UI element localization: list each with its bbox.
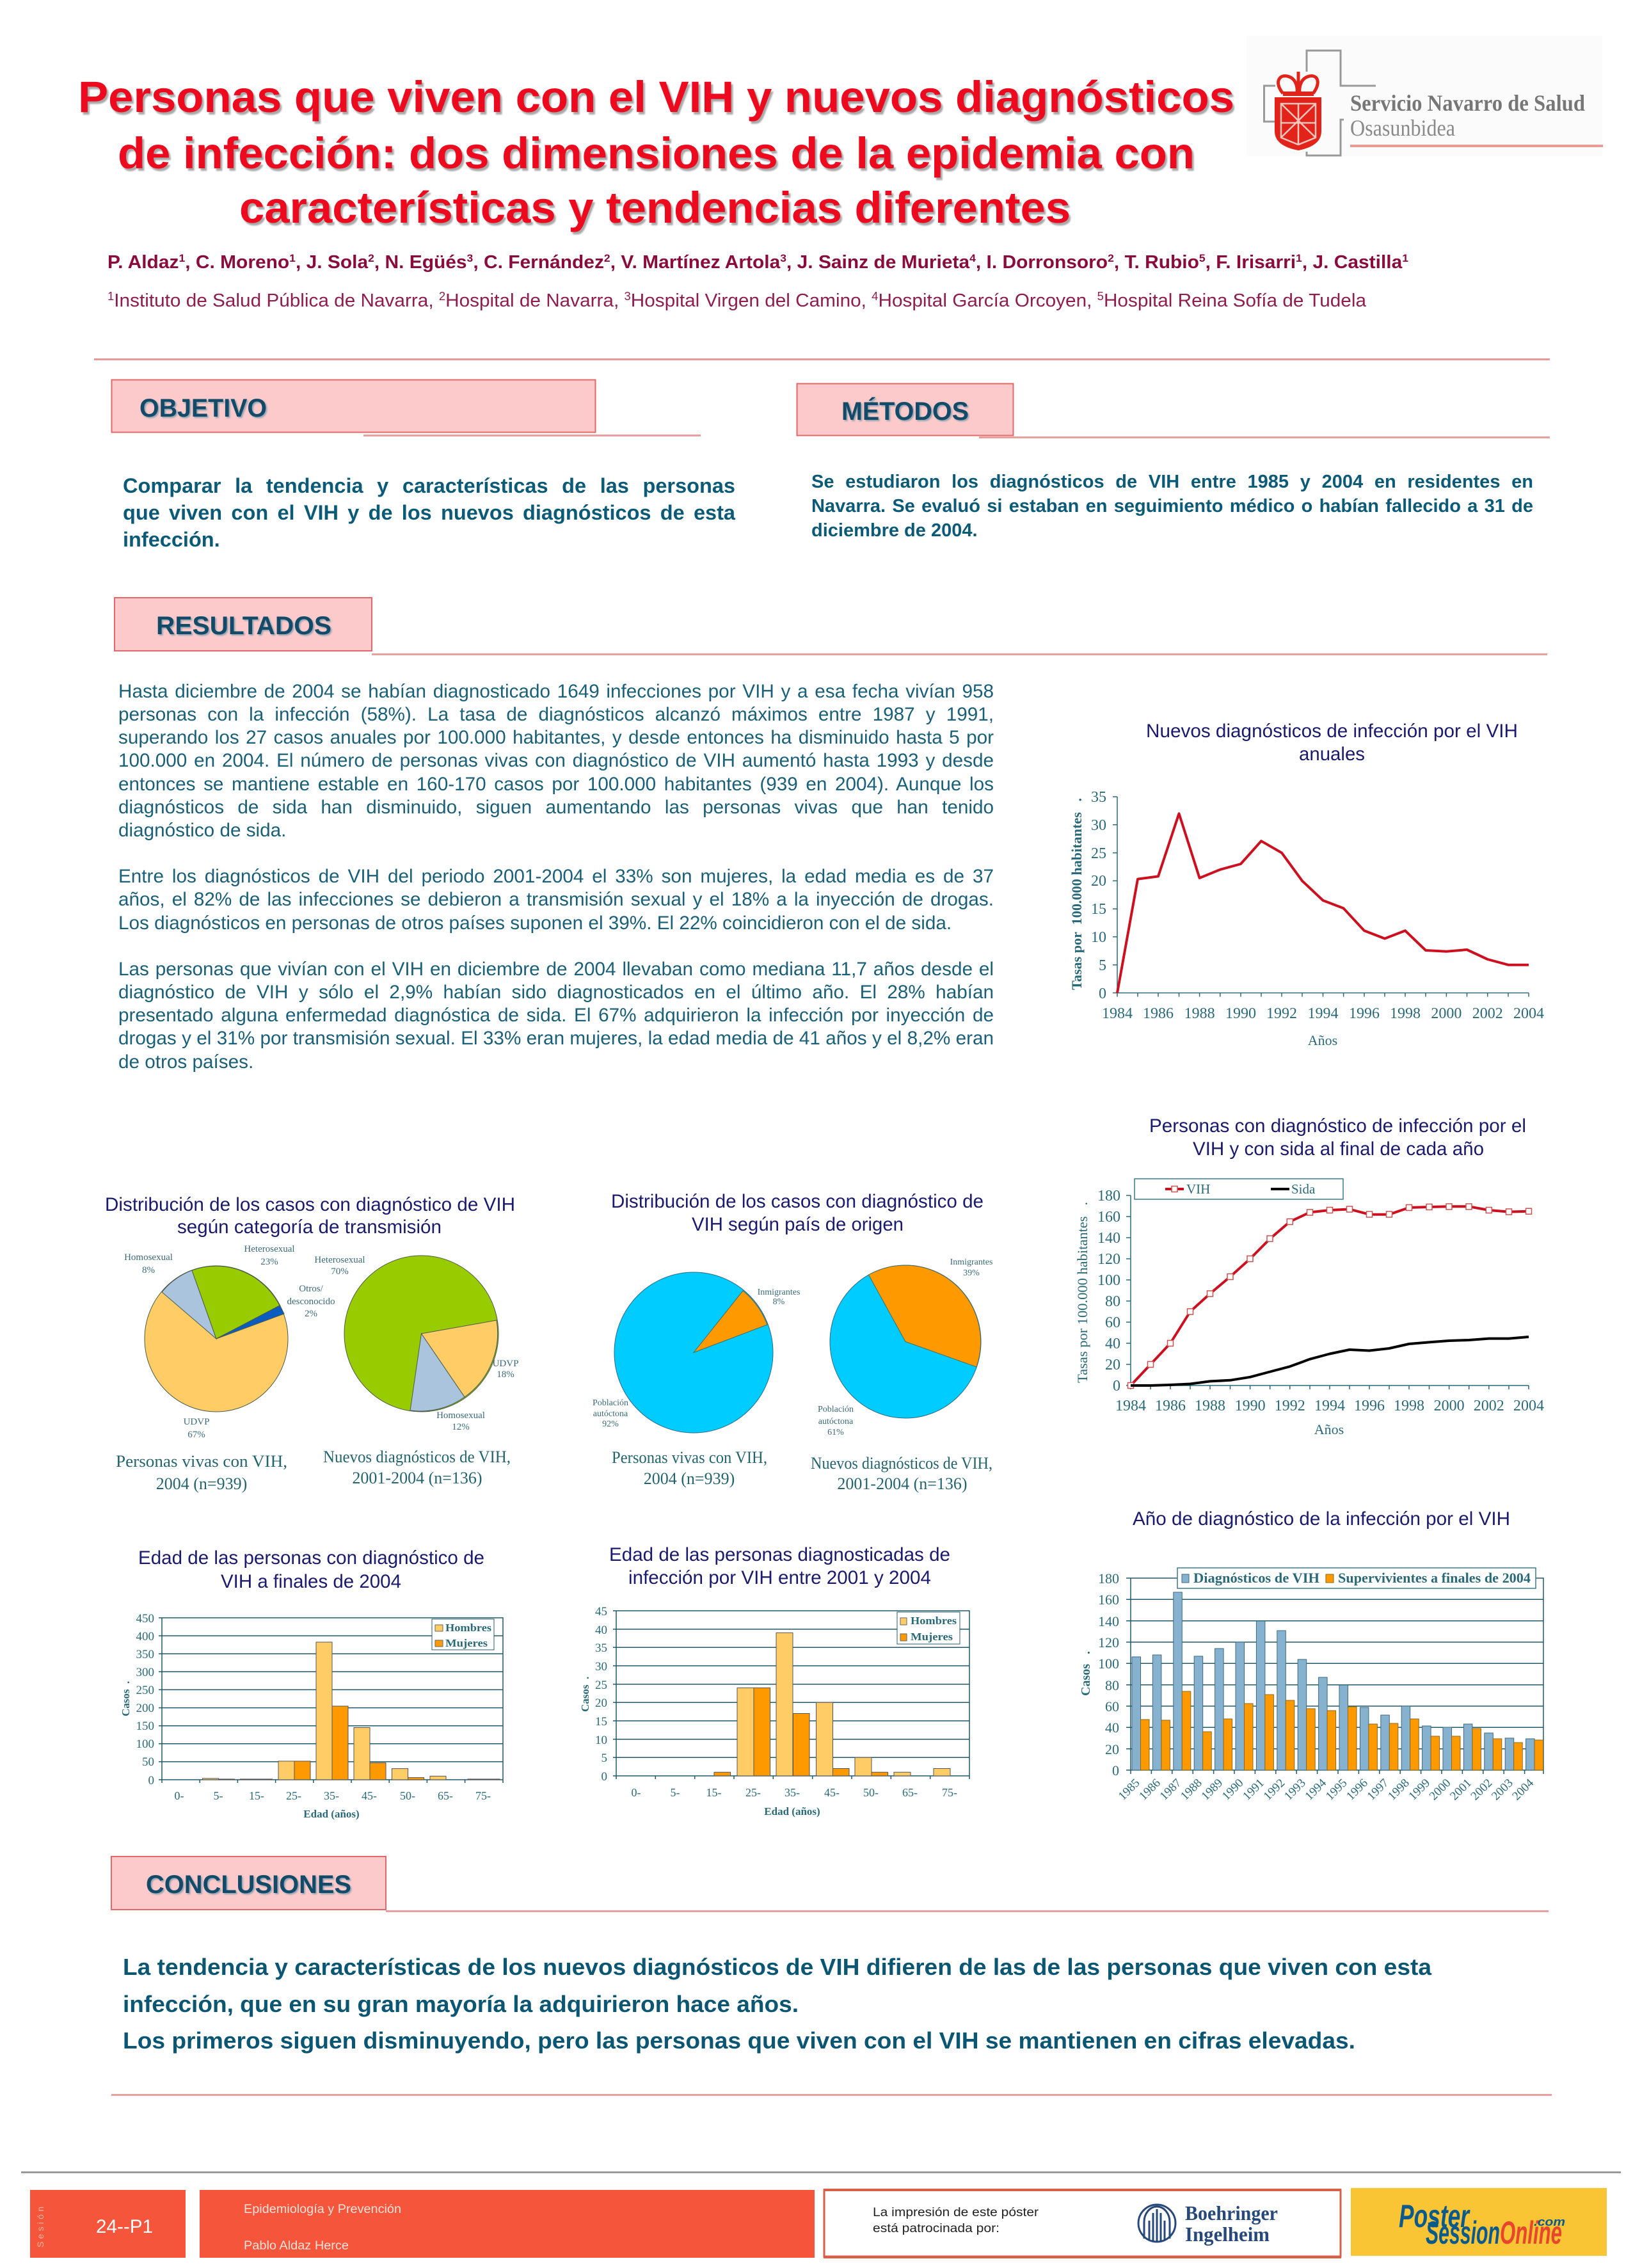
bar chart: edad a finales de 2004: 5- (214, 1789, 223, 1802)
conclusions text: infección, que en su gran mayoría la adquirieron hace años. (123, 1991, 799, 2017)
bar chart: edad 2001-2004: 20 (595, 1697, 607, 1710)
bar chart: edad 2001-2004: 40 (595, 1624, 607, 1637)
authors: 1 (1402, 252, 1408, 264)
bar chart: edad 2001-2004: Casos . (579, 1677, 591, 1712)
bar chart: año de diagnóstico: 120 (1098, 1634, 1119, 1650)
pie: personas vivas: desconocido (287, 1297, 335, 1307)
bar chart: edad 2001-2004: 15- (706, 1786, 722, 1799)
bar chart: edad 2001-2004: 45- (824, 1786, 840, 1799)
heading: métodos (797, 384, 1550, 438)
bar chart: año de diagnóstico (1079, 1508, 1543, 1803)
footer: sponsor: está patrocinada por: (873, 2222, 1000, 2235)
bars: diagnósticos de VIH (1132, 1592, 1534, 1770)
bars: mujeres (219, 1706, 500, 1780)
caption: nuevos diagnósticos (323, 1448, 511, 1487)
chart title: Personas con diagnóstico de infección por el (1149, 1115, 1526, 1137)
legend (897, 1612, 960, 1644)
text: métodos: diciembre de 2004. (811, 520, 978, 541)
chart title (105, 1194, 515, 1238)
bar chart: edad 2001-2004: Edad (años) (764, 1805, 820, 1817)
affiliations: Hospital García Orcoyen, (878, 291, 1097, 311)
authors: 3 (467, 252, 473, 264)
authors: 1 (179, 252, 185, 264)
chart title: Edad de las personas con diagnóstico de (138, 1547, 484, 1569)
chart title: Año de diagnóstico de la infección por el VIH (1133, 1508, 1510, 1529)
bar chart: edad a finales de 2004: 0- (174, 1789, 184, 1802)
pie: personas vivas: Población (593, 1398, 628, 1408)
bar chart: año de diagnóstico: 2000 (1427, 1777, 1454, 1803)
legend: Diagnósticos de VIH (1193, 1570, 1319, 1586)
bar chart: año de diagnóstico: 1988 (1178, 1777, 1205, 1803)
legend: Mujeres (445, 1637, 488, 1649)
pie: nuevos diagnósticos (818, 1258, 992, 1437)
bar chart: año de diagnóstico: 1992 (1261, 1777, 1287, 1803)
pie: personas vivas: UDVP (184, 1417, 209, 1427)
authors: 4 (969, 252, 976, 264)
line chart: nuevos diagnósticos: 1996 (1349, 1005, 1380, 1022)
bar chart: edad a finales de 2004: 150 (136, 1720, 154, 1733)
text: resultados: 100.000 en 2004. El número de personas vivas con diagnóstico de VIH aumentó hasta 1993 y desde (118, 750, 994, 771)
legend (1177, 1568, 1536, 1588)
bar chart: año de diagnóstico: 1997 (1365, 1777, 1391, 1803)
title: de infección: dos dimensiones de la epidemia con (118, 129, 1195, 178)
authors: 2 (368, 252, 374, 264)
caption: nuevos diagnósticos: 2001-2004 (n=136) (352, 1469, 482, 1487)
text: resultados: de otros países. (118, 1051, 253, 1073)
bar chart: año de diagnóstico: 1989 (1199, 1777, 1225, 1803)
legend: VIH (1186, 1181, 1210, 1197)
bar chart: año de diagnóstico: 1998 (1385, 1777, 1412, 1803)
text: resultados: presentado alguna enfermedad diagnóstica de sida. El 67% adquirieron la infección por inyección de (118, 1005, 994, 1026)
footer: PosterSessionOnline logo: .com (1534, 2216, 1565, 2228)
text: resultados: entonces se mantiene estable en 160-170 casos por 100.000 habitantes (939 en 2004). Aunque los (118, 774, 994, 795)
bar chart: edad a finales de 2004 (120, 1547, 503, 1820)
pie: personas vivas: 67% (187, 1430, 205, 1440)
legend: Supervivientes a finales de 2004 (1338, 1570, 1531, 1586)
bar chart: edad a finales de 2004: 50- (400, 1789, 415, 1802)
bar chart: edad 2001-2004: 0- (631, 1786, 641, 1799)
caption: nuevos diagnósticos: Nuevos diagnósticos de VIH, (323, 1448, 511, 1466)
authors: 2 (1108, 252, 1114, 264)
affiliations: 5 (1097, 290, 1104, 303)
line chart: nuevos diagnósticos: Años (1308, 1032, 1337, 1048)
bar chart: edad 2001-2004 (579, 1544, 969, 1817)
authors: 1 (289, 252, 296, 264)
footer: topic and presenter: Epidemiología y Prevención (244, 2203, 401, 2216)
affiliations: 1 (108, 290, 114, 303)
line chart: personas con diagnóstico y sida: 140 (1097, 1230, 1120, 1247)
line chart: personas con diagnóstico y sida: 0 (1113, 1378, 1120, 1394)
bar chart: edad a finales de 2004: 0 (148, 1774, 154, 1787)
bar chart: año de diagnóstico: 2001 (1447, 1777, 1474, 1803)
text: resultados: diagnósticos de sida han disminuido, siguen aumentando las personas vivas que han tenido (118, 797, 994, 818)
chart title: VIH a finales de 2004 (221, 1571, 401, 1592)
line chart: nuevos diagnósticos: 30 (1091, 817, 1106, 834)
line chart: nuevos diagnósticos: 1984 (1102, 1005, 1133, 1022)
chart title: infección por VIH entre 2001 y 2004 (628, 1567, 931, 1588)
authors: , C. Moreno (185, 252, 289, 273)
pie: nuevos diagnósticos: 70% (331, 1266, 349, 1277)
logo: Servicio Navarro de Salud: Osasunbidea (1350, 115, 1455, 141)
bar chart: edad 2001-2004: 50- (863, 1786, 879, 1799)
footer: PosterSessionOnline logo: Poster (1399, 2198, 1470, 2234)
title: características y tendencias diferentes (239, 183, 1071, 232)
footer: sponsor (824, 2189, 1341, 2258)
bar chart: año de diagnóstico: 1991 (1240, 1777, 1267, 1803)
heading: resultados (115, 598, 1547, 655)
pie: personas vivas: Inmigrantes (758, 1288, 800, 1297)
line: VIH (1127, 1204, 1532, 1389)
line chart: nuevos diagnósticos: 25 (1091, 845, 1106, 862)
affiliations: 4 (872, 290, 878, 303)
bar chart: año de diagnóstico: 1995 (1323, 1777, 1350, 1803)
text: resultados: personas con la infección (58%). La tasa de diagnósticos alcanzó máximos entre 1987 y 1991, (118, 704, 994, 725)
bar chart: edad a finales de 2004: 200 (136, 1702, 154, 1715)
authors: 5 (1199, 252, 1206, 264)
line chart: personas con diagnóstico y sida: 1986 (1155, 1398, 1186, 1414)
heading: conclusiones: CONCLUSIONES (146, 1871, 351, 1899)
line chart: personas con diagnóstico y sida: 40 (1105, 1336, 1120, 1352)
bar chart: edad 2001-2004: 15 (595, 1715, 607, 1729)
bar chart: año de diagnóstico: 180 (1098, 1570, 1119, 1586)
bar chart: año de diagnóstico: 1996 (1344, 1777, 1371, 1803)
text: resultados: años, el 82% de las infecciones se debieron a transmisión sexual y el 18% a la inyección de drogas. (118, 889, 994, 910)
bars: hombres (202, 1642, 484, 1780)
line chart: nuevos diagnósticos: 15 (1091, 901, 1106, 918)
text: resultados: Hasta diciembre de 2004 se habían diagnosticado 1649 infecciones por VIH y a esa fecha vivían 958 (118, 681, 994, 702)
authors: 2 (604, 252, 610, 264)
bar chart: edad 2001-2004: 35- (785, 1786, 800, 1799)
line chart: nuevos diagnósticos: 1998 (1390, 1005, 1421, 1022)
bar chart: edad a finales de 2004: 65- (438, 1789, 453, 1802)
conclusions text (123, 1954, 1432, 2054)
text: resultados: superando los 27 casos anuales por 100.000 habitantes, y desde entonces ha disminuido hasta 5 por (118, 727, 994, 748)
caption: personas vivas: 2004 (n=939) (644, 1469, 735, 1488)
pie: personas vivas (124, 1244, 335, 1440)
text: objetivo: que viven con el VIH y de los nuevos diagnósticos de esta (123, 501, 735, 524)
text: resultados: diagnóstico de sida. (118, 820, 286, 841)
bar chart: edad 2001-2004: 5- (671, 1786, 680, 1799)
pie: nuevos diagnósticos: Inmigrantes (950, 1258, 992, 1267)
line chart: personas con diagnóstico y sida: 1988 (1195, 1398, 1225, 1414)
pie: personas vivas (593, 1272, 800, 1433)
chart title (611, 1191, 984, 1235)
line chart: nuevos diagnósticos: 5 (1099, 957, 1106, 974)
footer: PosterSessionOnline logo (1351, 2188, 1607, 2256)
bar chart: edad a finales de 2004: 15- (249, 1789, 264, 1802)
line chart: personas con diagnóstico y sida: 120 (1097, 1251, 1120, 1268)
affiliations: Hospital Reina Sofía de Tudela (1104, 291, 1367, 311)
text: objetivo: Comparar la tendencia y características de las personas (123, 474, 735, 497)
authors: , N. Egüés (374, 252, 467, 273)
bar chart: edad 2001-2004: 30 (595, 1660, 607, 1673)
pie: personas vivas: autóctona (593, 1409, 628, 1419)
footer: session code: 24--P1 (96, 2216, 153, 2237)
chart title: Distribución de los casos con diagnóstico de VIH (105, 1194, 515, 1215)
bar chart: año de diagnóstico: 1994 (1302, 1776, 1329, 1803)
legend: Hombres (911, 1615, 957, 1627)
caption: personas vivas: Personas vivas con VIH, (116, 1452, 287, 1471)
bar chart: año de diagnóstico: 1987 (1158, 1777, 1184, 1803)
bar chart: edad a finales de 2004: 45- (362, 1789, 377, 1802)
chart title: Edad de las personas diagnosticadas de (609, 1544, 950, 1565)
footer: sponsor: La impresión de este póster (873, 2206, 1039, 2219)
authors: , J. Sainz de Murieta (786, 252, 970, 273)
text: resultados: Entre los diagnósticos de VIH del periodo 2001-2004 el 33% son mujeres, la edad media es de 37 (118, 866, 994, 887)
pie: personas vivas: 8% (142, 1265, 155, 1275)
text: resultados: diagnóstico de VIH y sólo el 2,9% habían sido diagnosticados en el último año. El 28% habían (118, 982, 994, 1003)
authors: 3 (780, 252, 786, 264)
bar chart: año de diagnóstico: 1990 (1220, 1777, 1247, 1803)
bar chart: año de diagnóstico: 1986 (1136, 1777, 1163, 1803)
pie group: país de origen (593, 1191, 992, 1493)
pie: personas vivas: Otros/ (299, 1284, 324, 1294)
line chart: personas con diagnóstico y sida (1074, 1115, 1544, 1437)
line chart: nuevos diagnósticos: 2002 (1472, 1005, 1503, 1022)
pie: personas vivas: 2% (305, 1309, 317, 1319)
bar chart: edad a finales de 2004: 450 (136, 1612, 154, 1625)
line chart: personas con diagnóstico y sida: 1998 (1394, 1398, 1424, 1414)
bar chart: año de diagnóstico: 20 (1105, 1741, 1119, 1757)
line chart: nuevos diagnósticos: 35 (1091, 789, 1106, 806)
line chart: nuevos diagnósticos: 0 (1099, 986, 1106, 1002)
authors: P. Aldaz (108, 252, 177, 273)
authors: 1 (1296, 252, 1302, 264)
affiliations: 2 (439, 290, 445, 303)
chart title (1146, 721, 1518, 765)
bar chart: edad 2001-2004: 0 (601, 1770, 607, 1784)
bar chart: año de diagnóstico: Casos . (1079, 1651, 1093, 1696)
logo: Servicio Navarro de Salud (1247, 36, 1603, 156)
line chart: nuevos diagnósticos: 2000 (1431, 1005, 1462, 1022)
pie: nuevos diagnósticos: Heterosexual (314, 1255, 365, 1265)
bar chart: año de diagnóstico: 2002 (1469, 1777, 1495, 1803)
caption: personas vivas: Personas vivas con VIH, (612, 1448, 767, 1467)
chart title: VIH y con sida al final de cada año (1193, 1138, 1484, 1160)
line chart: personas con diagnóstico y sida: 2000 (1434, 1398, 1465, 1414)
authors: , F. Irisarri (1206, 252, 1296, 273)
heading: objetivo: OBJETIVO (139, 394, 267, 422)
footer: topic and presenter: Pablo Aldaz Herce (244, 2239, 349, 2253)
line chart: personas con diagnóstico y sida: 20 (1105, 1357, 1120, 1373)
bar chart: edad a finales de 2004: 75- (475, 1789, 491, 1802)
bar chart: año de diagnóstico: 160 (1098, 1592, 1119, 1608)
line chart: personas con diagnóstico y sida: 180 (1097, 1188, 1120, 1204)
bar chart: año de diagnóstico: 0 (1112, 1762, 1119, 1778)
line chart: personas con diagnóstico y sida: 1996 (1354, 1398, 1385, 1414)
bar chart: edad 2001-2004: 65- (902, 1786, 918, 1799)
pie: nuevos diagnósticos: Población (818, 1405, 854, 1414)
heading: conclusiones (111, 1857, 1549, 1912)
bar chart: año de diagnóstico: 1985 (1116, 1777, 1143, 1803)
bar chart: edad a finales de 2004: 300 (136, 1666, 154, 1679)
pie: personas vivas: 92% (602, 1419, 619, 1429)
pie: personas vivas: Heterosexual (244, 1244, 295, 1254)
chart title: VIH según país de origen (692, 1214, 904, 1235)
pie: nuevos diagnósticos (314, 1255, 518, 1432)
bar chart: edad 2001-2004: 25- (745, 1786, 761, 1799)
line chart: personas con diagnóstico y sida: 2004 (1513, 1398, 1544, 1414)
affiliations: 3 (625, 290, 631, 303)
footer: sponsor: Ingelheim (1185, 2223, 1270, 2246)
pie group: categoría de transmisión (105, 1194, 518, 1493)
footer: PosterSessionOnline logo: Online (1500, 2215, 1562, 2251)
line: sida (1131, 1337, 1529, 1386)
heading: objetivo (111, 380, 701, 436)
caption: personas vivas (612, 1448, 767, 1488)
bar chart: año de diagnóstico: 1993 (1282, 1777, 1309, 1803)
bar chart: edad 2001-2004: 25 (595, 1679, 607, 1692)
text: resultados: Las personas que vivían con el VIH en diciembre de 2004 llevaban como mediana 11,7 años desde el (118, 959, 994, 980)
line chart: personas con diagnóstico y sida: 1992 (1275, 1398, 1305, 1414)
line chart: personas con diagnóstico y sida: 1984 (1115, 1398, 1146, 1414)
authors: , T. Rubio (1114, 252, 1199, 273)
footer: session code: Sesión (35, 2207, 45, 2248)
affiliations: Hospital Virgen del Camino, (631, 291, 872, 311)
affiliations: Hospital de Navarra, (445, 291, 625, 311)
text: resultados: Los diagnósticos en personas de otros países suponen el 39%. El 22% coincidieron con el de sida. (118, 913, 952, 934)
caption: nuevos diagnósticos (811, 1454, 992, 1493)
footer: PosterSessionOnline logo: Session (1426, 2215, 1500, 2251)
authors: , J. Castilla (1302, 252, 1403, 273)
chart title: Nuevos diagnósticos de infección por el VIH (1146, 721, 1518, 742)
line chart: nuevos diagnósticos: 1986 (1143, 1005, 1174, 1022)
heading: resultados: RESULTADOS (156, 612, 331, 640)
authors: , I. Dorronsoro (976, 252, 1108, 273)
pie: personas vivas: 23% (260, 1257, 278, 1267)
affiliations: Instituto de Salud Pública de Navarra, (114, 291, 439, 311)
chart title: anuales (1299, 744, 1365, 765)
bar chart: año de diagnóstico: 140 (1098, 1613, 1119, 1629)
line chart: nuevos diagnósticos: Tasas por 100.000 habitantes . (1069, 798, 1085, 990)
line chart: nuevos diagnósticos: 1990 (1225, 1005, 1256, 1022)
legend: Hombres (445, 1622, 491, 1634)
footer: session code (30, 2190, 186, 2258)
pie: nuevos diagnósticos: 61% (827, 1428, 844, 1437)
text: objetivo (123, 474, 736, 551)
bars: mujeres (714, 1688, 888, 1776)
caption: nuevos diagnósticos: 2001-2004 (n=136) (837, 1474, 968, 1493)
pie: personas vivas: Homosexual (124, 1252, 173, 1263)
bar chart: año de diagnóstico: 2003 (1489, 1777, 1516, 1803)
bar chart: edad a finales de 2004: 25- (286, 1789, 301, 1802)
bar chart: año de diagnóstico: 40 (1105, 1720, 1119, 1736)
line chart: nuevos diagnósticos (1069, 721, 1544, 1048)
bar chart: año de diagnóstico: 100 (1098, 1656, 1119, 1672)
bar chart: edad 2001-2004: 10 (595, 1734, 607, 1747)
bar chart: año de diagnóstico: 60 (1105, 1698, 1119, 1714)
line chart: personas con diagnóstico y sida: Años (1314, 1421, 1344, 1437)
legend: Mujeres (911, 1631, 953, 1643)
logo: Servicio Navarro de Salud: Servicio Navarro de Salud (1350, 90, 1585, 116)
bars: supervivientes (1140, 1691, 1543, 1770)
chart title: según categoría de transmisión (177, 1217, 442, 1238)
line chart: nuevos diagnósticos: 10 (1091, 929, 1106, 946)
line chart: personas con diagnóstico y sida: 1990 (1235, 1398, 1266, 1414)
conclusions text: La tendencia y características de los nuevos diagnósticos de VIH difieren de las de las personas que viven con esta (123, 1954, 1432, 1980)
bar chart: edad a finales de 2004: 350 (136, 1648, 154, 1661)
pie: nuevos diagnósticos: 12% (452, 1422, 470, 1432)
bar chart: edad a finales de 2004: 400 (136, 1630, 154, 1643)
icon: Boehringer logo (1138, 2205, 1175, 2242)
line chart: personas con diagnóstico y sida: 160 (1097, 1209, 1120, 1226)
text: resultados (118, 681, 994, 1073)
legend (1135, 1179, 1343, 1199)
chart title (609, 1544, 950, 1588)
authors: , J. Sola (296, 252, 369, 273)
line chart: nuevos diagnósticos: 1988 (1184, 1005, 1215, 1022)
caption: nuevos diagnósticos: Nuevos diagnósticos de VIH, (811, 1454, 992, 1473)
line chart: nuevos diagnósticos: 1992 (1266, 1005, 1297, 1022)
bar chart: edad a finales de 2004: 35- (324, 1789, 339, 1802)
pie: nuevos diagnósticos: 39% (963, 1268, 980, 1278)
line chart: personas con diagnóstico y sida: 60 (1105, 1314, 1120, 1331)
authors: , V. Martínez Artola (610, 252, 781, 273)
pie: personas vivas: 8% (773, 1297, 785, 1307)
text: objetivo: infección. (123, 528, 220, 551)
line chart: nuevos diagnósticos: 2004 (1513, 1005, 1544, 1022)
chart title: Distribución de los casos con diagnóstico de (611, 1191, 984, 1212)
text: métodos (811, 472, 1533, 541)
title (78, 72, 1234, 232)
text: métodos: Navarra. Se evaluó si estaban en seguimiento médico o habían fallecido a 31 de (811, 496, 1533, 516)
line chart: nuevos diagnósticos: 1994 (1308, 1005, 1339, 1022)
bar chart: edad 2001-2004: 45 (595, 1605, 607, 1618)
bar chart: edad 2001-2004: 75- (942, 1786, 957, 1799)
bars: hombres (737, 1633, 950, 1776)
line chart: personas con diagnóstico y sida: 80 (1105, 1293, 1120, 1310)
bar chart: edad a finales de 2004: 50 (142, 1755, 154, 1769)
legend (432, 1619, 494, 1650)
text: métodos: Se estudiaron los diagnósticos de VIH entre 1985 y 2004 en residentes en (811, 472, 1533, 492)
authors: , C. Fernández (473, 252, 604, 273)
pie: nuevos diagnósticos: UDVP (493, 1359, 518, 1369)
conclusions text: Los primeros siguen disminuyendo, pero las personas que viven con el VIH se mantienen en cifras elevadas. (123, 2027, 1355, 2054)
footer: topic and presenter (200, 2190, 815, 2258)
bar chart: edad a finales de 2004: 100 (136, 1737, 154, 1751)
bar chart: edad 2001-2004: 35 (595, 1641, 607, 1655)
line chart: personas con diagnóstico y sida: 2002 (1474, 1398, 1504, 1414)
title: Personas que viven con el VIH y nuevos diagnósticos (78, 72, 1234, 122)
bar chart: año de diagnóstico: 2004 (1510, 1776, 1536, 1803)
pie: nuevos diagnósticos: autóctona (818, 1417, 854, 1426)
bar chart: año de diagnóstico: 1999 (1406, 1777, 1433, 1803)
footer: sponsor: Boehringer (1185, 2201, 1278, 2224)
text: resultados: drogas y el 31% por transmisión sexual. El 33% eran mujeres, la edad media de 41 años y el 8,2% eran (118, 1028, 994, 1049)
bar chart: edad a finales de 2004: Casos . (120, 1681, 132, 1716)
line chart: personas con diagnóstico y sida: 1994 (1314, 1398, 1345, 1414)
bar chart: edad a finales de 2004: Edad (años) (303, 1808, 360, 1820)
pie: nuevos diagnósticos: 18% (497, 1370, 514, 1380)
line chart: nuevos diagnósticos: 20 (1091, 873, 1106, 890)
bar chart: edad 2001-2004: 5 (601, 1752, 607, 1765)
chart title (1149, 1115, 1526, 1160)
line chart: personas con diagnóstico y sida: 100 (1097, 1272, 1120, 1289)
line chart: personas con diagnóstico y sida: Tasas por 100.000 habitantes . (1074, 1202, 1090, 1383)
heading: métodos: MÉTODOS (841, 397, 969, 426)
legend: Sida (1291, 1181, 1316, 1197)
caption: personas vivas (116, 1452, 287, 1493)
bar chart: año de diagnóstico: 80 (1105, 1677, 1119, 1693)
bar chart: edad a finales de 2004: 250 (136, 1684, 154, 1697)
caption: personas vivas: 2004 (n=939) (156, 1474, 247, 1493)
pie: nuevos diagnósticos: Homosexual (436, 1410, 485, 1421)
data line (1117, 813, 1529, 993)
chart title (138, 1547, 484, 1592)
